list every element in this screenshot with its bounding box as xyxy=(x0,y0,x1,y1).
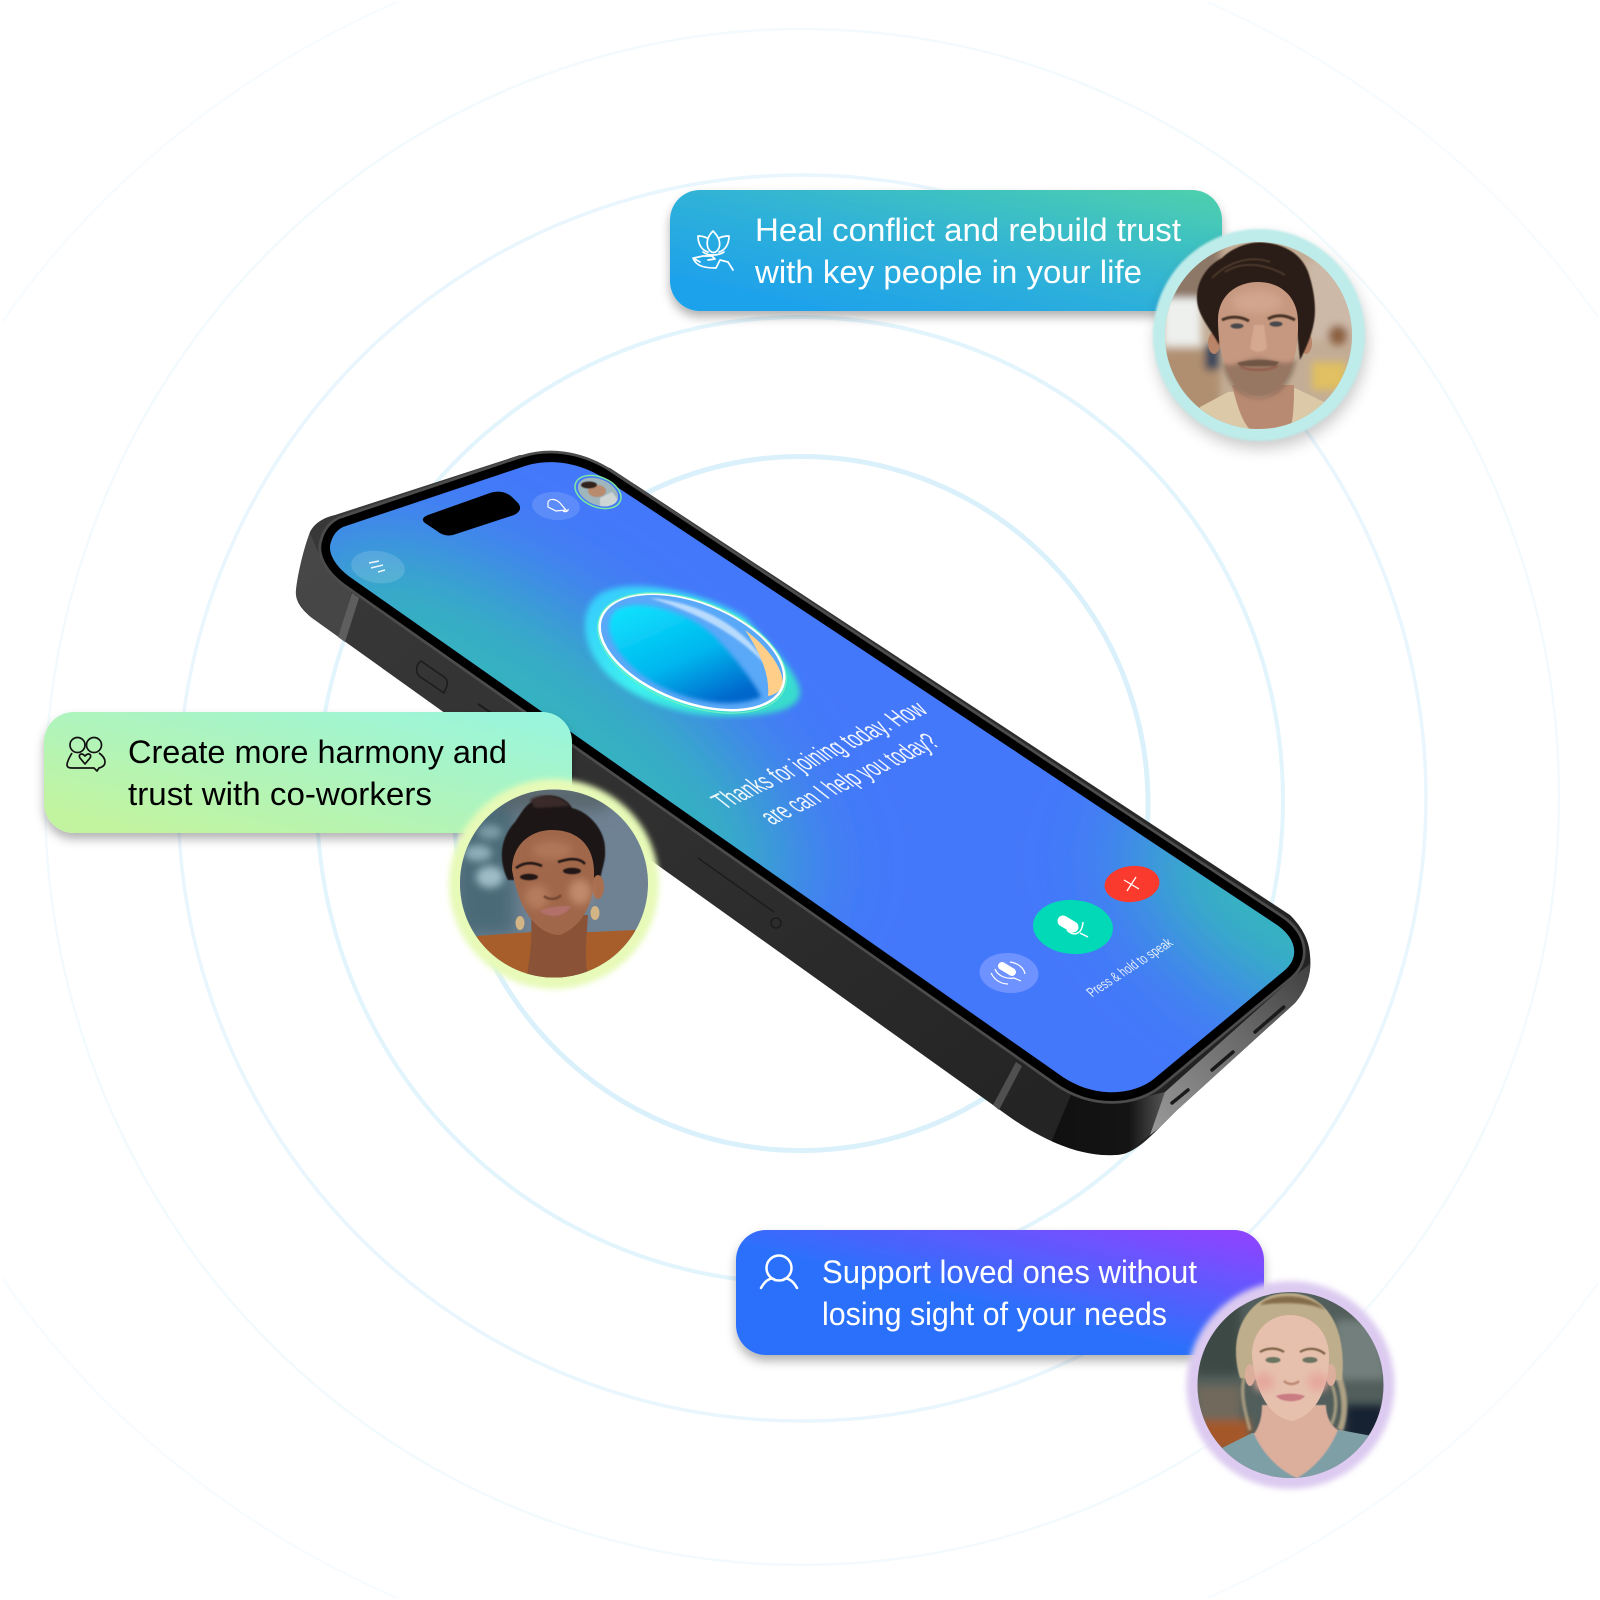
icon: lotus in hand xyxy=(693,231,733,270)
callout background xyxy=(736,1230,1264,1355)
hair back xyxy=(1197,242,1315,360)
avatar: blonde woman xyxy=(1186,1281,1394,1489)
phone rim xyxy=(330,462,1294,1092)
nose xyxy=(1284,1381,1299,1384)
callout: support xyxy=(736,1230,1264,1355)
dynamic island xyxy=(423,492,520,535)
eyes xyxy=(1230,323,1244,329)
ear xyxy=(592,875,604,899)
voice mode button xyxy=(978,951,1040,995)
neck and chest xyxy=(1254,1405,1338,1478)
avatar: woman xyxy=(449,779,659,989)
callout text: Support loved ones without xyxy=(822,1254,1197,1290)
microphone button xyxy=(1031,897,1115,957)
blouse xyxy=(476,930,636,978)
antenna band left xyxy=(338,593,359,642)
callout background xyxy=(44,712,572,833)
brows xyxy=(1222,316,1295,321)
screen teal glow right xyxy=(1094,810,1294,1028)
avatar halo xyxy=(449,779,659,989)
screen background xyxy=(330,462,1294,1092)
phone bezel xyxy=(330,462,1294,1092)
screen teal glow left xyxy=(330,496,836,912)
antenna band bottom xyxy=(993,1062,1022,1110)
end call button xyxy=(1103,863,1161,905)
shirt xyxy=(1200,388,1324,429)
phone bottom dark corner xyxy=(1052,1092,1175,1156)
side button xyxy=(698,858,781,928)
hair texture xyxy=(1212,259,1285,278)
bell button xyxy=(531,490,581,522)
avatar portrait xyxy=(1165,242,1352,429)
forehead highlight xyxy=(1234,292,1280,312)
lips xyxy=(540,906,571,916)
callout background xyxy=(670,190,1222,311)
earrings xyxy=(516,916,524,930)
silent switch xyxy=(417,661,447,693)
moustache xyxy=(1237,360,1279,366)
ears xyxy=(1208,332,1220,354)
mouth xyxy=(1241,366,1277,370)
mini profile avatar xyxy=(574,474,622,510)
callout: heal conflict xyxy=(670,190,1222,311)
brows xyxy=(1260,1349,1325,1354)
hair strands xyxy=(1243,1375,1344,1430)
phone body side xyxy=(296,455,1310,1155)
eyes xyxy=(1266,1357,1280,1363)
avatar portrait xyxy=(1198,1292,1384,1478)
orb light band xyxy=(650,598,768,668)
nose xyxy=(544,895,561,899)
callout text: losing sight of your needs xyxy=(822,1296,1167,1332)
press and hold label: Press & hold to speak xyxy=(1083,935,1177,1000)
face xyxy=(1252,1315,1329,1421)
neck xyxy=(527,915,588,978)
bottom ports xyxy=(1172,1006,1285,1103)
orb peach crescent xyxy=(745,630,783,696)
phone bottom port face xyxy=(1150,960,1315,1135)
face xyxy=(512,830,594,935)
lips xyxy=(1276,1394,1305,1401)
phone xyxy=(296,450,1310,1156)
nose xyxy=(1250,325,1267,352)
hair xyxy=(1236,1293,1343,1380)
orb inner sphere xyxy=(609,605,761,703)
callout text: Create more harmony and xyxy=(128,734,507,770)
phone screen xyxy=(330,462,1294,1092)
assistant message: Thanks for joining today. How xyxy=(704,696,936,814)
avatar halo xyxy=(1186,1281,1394,1489)
menu button xyxy=(349,547,407,587)
face xyxy=(1218,282,1298,398)
callout text: Heal conflict and rebuild trust xyxy=(755,212,1181,248)
orb outer ring xyxy=(581,569,803,737)
ears xyxy=(1245,1364,1255,1386)
callout: harmony xyxy=(44,712,572,833)
assistant message: are can I help you today? xyxy=(752,729,947,830)
callout text xyxy=(822,1254,1197,1332)
brows xyxy=(516,859,585,868)
callout text xyxy=(128,734,507,812)
sweater xyxy=(1222,1430,1368,1478)
stubble xyxy=(1222,358,1297,398)
volume button xyxy=(478,704,505,722)
avatar shadow xyxy=(1156,238,1366,448)
avatar: man xyxy=(1153,229,1366,448)
phone left corner highlight xyxy=(296,534,352,636)
orb ring xyxy=(584,571,800,733)
orb glow xyxy=(585,586,800,716)
orb body xyxy=(584,571,800,733)
avatar halo xyxy=(1153,229,1365,441)
callout text: with key people in your life xyxy=(754,254,1142,290)
hair xyxy=(502,796,605,880)
icon: person xyxy=(761,1256,797,1288)
callout text: trust with co-workers xyxy=(128,776,432,812)
avatar portrait xyxy=(460,790,648,978)
voice orb xyxy=(581,569,803,737)
callout text xyxy=(754,212,1181,290)
eyes xyxy=(520,874,538,880)
icon: people with heart xyxy=(67,738,105,771)
neck xyxy=(1232,385,1294,432)
